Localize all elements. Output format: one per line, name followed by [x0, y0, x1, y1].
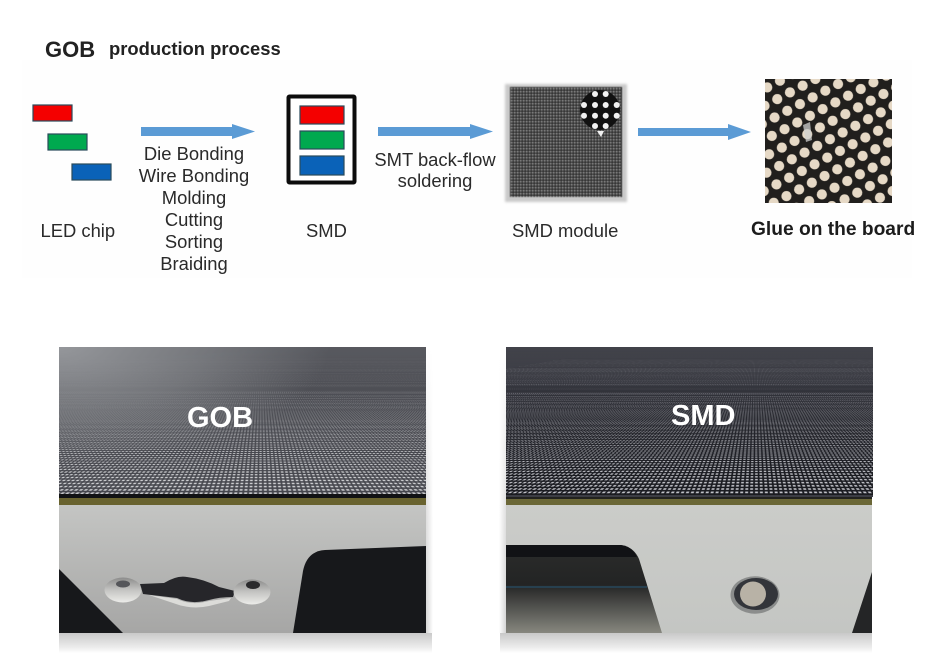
metal frame: SMD: [506, 497, 872, 633]
shadow: SMD photo side: [499, 347, 506, 633]
title: GOB: [45, 37, 95, 62]
text block: SMT soldering: soldering: [398, 170, 472, 191]
icon: SMD module: [505, 84, 627, 202]
LED surface: SMD: [506, 347, 873, 497]
icon: SMD package: [288, 96, 354, 182]
label: SMD module: SMD module: [512, 220, 618, 241]
label: GOB: GOB: [187, 402, 253, 434]
text block: packaging steps: Cutting: [165, 209, 223, 230]
arrow: SMD to module: [378, 124, 493, 139]
panel: GOB photo: [59, 347, 426, 633]
title: [45, 37, 281, 62]
label: LED chip: LED chip: [40, 220, 115, 241]
LED surface: GOB: [59, 347, 426, 497]
text block: SMT soldering: SMT back-flow: [374, 149, 496, 170]
label: glue on the board: Glue on the board: [751, 219, 915, 240]
icon: LED chips: [33, 105, 111, 180]
text block: packaging steps: Wire Bonding: [139, 165, 249, 186]
icon: glue board photo: [765, 79, 892, 203]
diagram background: [22, 60, 912, 278]
shadow: GOB photo bottom: [59, 633, 432, 653]
shadow: SMD photo bottom: [500, 633, 872, 653]
text block: packaging steps: Braiding: [160, 253, 228, 274]
panel: production process diagram: [32, 37, 915, 274]
label: SMD: SMD: [306, 220, 347, 241]
arrow: chip to SMD: [141, 124, 255, 139]
text block: packaging steps: [139, 143, 249, 274]
metal frame: GOB: [59, 494, 426, 633]
title: production process: [109, 38, 281, 59]
label: SMD: SMD: [671, 400, 735, 432]
panel: SMD photo: [506, 347, 873, 633]
text block: packaging steps: Molding: [162, 187, 226, 208]
text block: packaging steps: Die Bonding: [144, 143, 244, 164]
text block: packaging steps: Sorting: [165, 231, 223, 252]
arrow: module to glue: [638, 124, 751, 140]
shadow: GOB photo side: [426, 347, 433, 633]
text block: SMT soldering: [374, 149, 496, 191]
